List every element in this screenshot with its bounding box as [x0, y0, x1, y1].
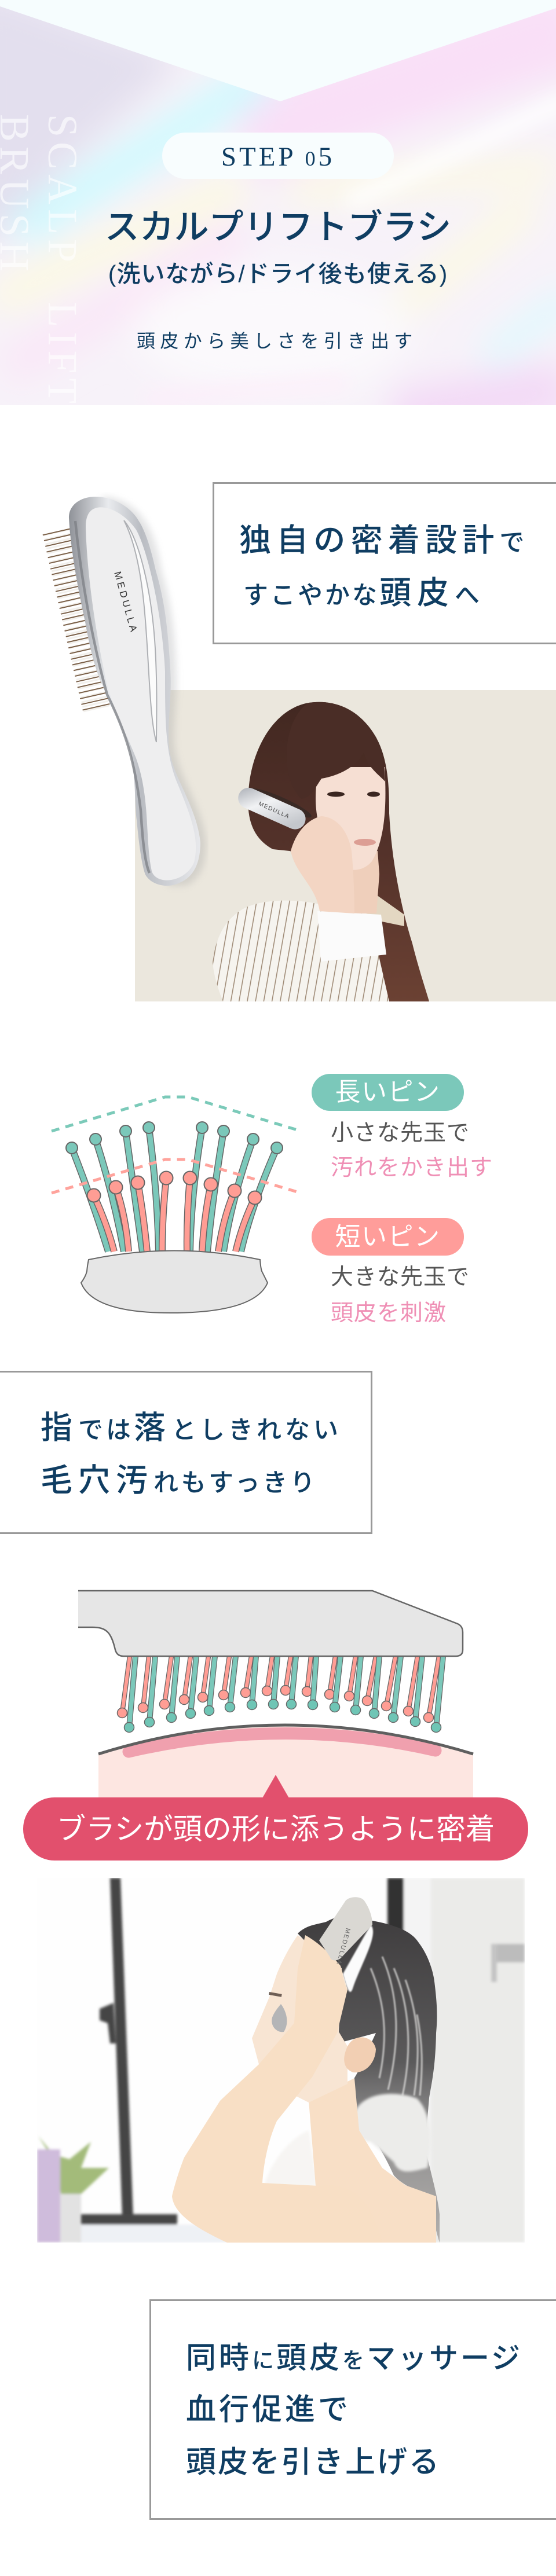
brush side profile [78, 1591, 463, 1656]
hair [248, 702, 429, 1001]
scalp highlight band [129, 1733, 436, 1752]
hand [291, 816, 354, 913]
title: スカルプリフトブラシ [105, 208, 451, 247]
legend pill: long pin [312, 1074, 464, 1111]
legend pill: long pin: 長いピン [335, 1078, 440, 1106]
hero panel [0, 0, 556, 405]
callout line 1: 独自の密着設計で [239, 522, 527, 558]
arm [172, 1935, 382, 2243]
face [252, 1935, 348, 2102]
legend text: long pin [331, 1121, 493, 1180]
long-pin reach line [52, 1097, 301, 1131]
foam on brush [343, 1925, 373, 1992]
subtitle: (洗いながら/ドライ後も使える) [108, 260, 448, 287]
neck [348, 851, 379, 913]
pink short pins [87, 1172, 262, 1252]
photo: shampooing with brush [37, 1878, 525, 2243]
legend pill: short pin: 短いピン [335, 1223, 440, 1251]
window and wall background [78, 1878, 525, 2243]
callout line 2: 血行促進で [186, 2393, 351, 2427]
eyes [327, 792, 380, 797]
silver brush handle behind hand [272, 2004, 287, 2032]
long hair [298, 1915, 440, 2243]
photo: woman brushing hair [135, 690, 556, 1001]
step label: STEP 05 [221, 142, 335, 172]
short pins [117, 1656, 439, 1723]
hair streaks [371, 1957, 422, 2096]
product image: silver brush [43, 496, 207, 887]
foam in hair [354, 2094, 430, 2171]
teal long pins [66, 1122, 283, 1252]
lips [354, 839, 376, 846]
vertical english: scalp lift: SCALP LIFT [39, 114, 86, 405]
scalp [98, 1725, 473, 1800]
fringe [287, 702, 385, 799]
brush face [86, 507, 196, 880]
pill text: ブラシが頭の形に添うように密着 [57, 1812, 495, 1845]
brush in hand [235, 781, 314, 834]
bristles [56, 531, 97, 712]
callout line 2: すこやかな頭皮へ [243, 575, 482, 611]
fit diagram [78, 1590, 474, 1797]
pill text [23, 1797, 528, 1861]
callout line 1: 指では落としきれない [41, 1410, 342, 1445]
step pill [162, 133, 394, 179]
legend pill: short pin [312, 1218, 464, 1256]
plant and bottle [37, 2136, 109, 2243]
callout box: unique close-fit design [213, 482, 556, 644]
pin diagram [51, 1095, 297, 1313]
tagline: 頭皮から美しさを引き出す [137, 331, 418, 351]
iridescent background [0, 0, 556, 405]
brush on head [319, 1897, 372, 1961]
brush shadow [101, 497, 206, 886]
shirt [213, 901, 403, 1001]
scalp outline [98, 1725, 473, 1754]
callout line 2: 毛穴汚れもすっきり [41, 1462, 317, 1498]
callout line 1: 同時に頭皮をマッサージ [186, 2342, 522, 2375]
legend text: short pin [331, 1265, 470, 1326]
pointer triangle [263, 1775, 288, 1797]
eyebrow [269, 1992, 282, 1997]
neck and torso [309, 2078, 436, 2243]
long pins [124, 1656, 443, 1732]
callout pill with pointer [23, 1775, 528, 1861]
legend text: long pin: 汚れをかき出す [331, 1155, 493, 1180]
brush in hand: MEDULLA [258, 801, 291, 820]
brush brand name: MEDULLA [335, 1927, 352, 1966]
chrome edge [75, 521, 149, 873]
brand name: MEDULLA [112, 570, 140, 636]
ear [344, 2037, 376, 2072]
brush body [69, 497, 200, 886]
cuff [317, 911, 386, 962]
callout line 3: 頭皮を引き上げる [186, 2446, 441, 2479]
callout box: pore dirt [0, 1371, 372, 1534]
chest foam [264, 2130, 317, 2186]
collar [353, 878, 404, 926]
short-pin reach line [52, 1159, 301, 1193]
face [316, 767, 385, 870]
legend text: short pin: 頭皮を刺激 [331, 1301, 447, 1326]
callout box: massage [149, 2299, 556, 2520]
chrome highlight [124, 520, 156, 742]
legend text: long pin: 小さな先玉で [331, 1121, 470, 1146]
brush base [81, 1250, 268, 1313]
legend text: short pin: 大きな先玉で [331, 1265, 470, 1290]
